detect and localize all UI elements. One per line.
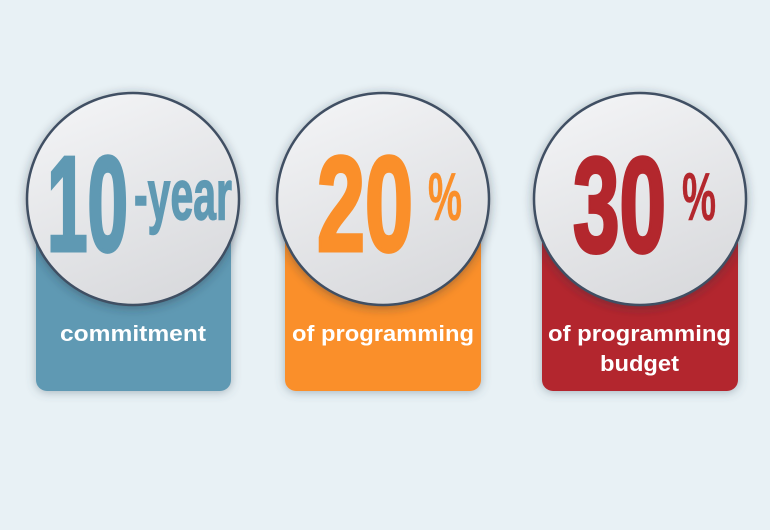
panel: 30% of programming budget (534, 93, 746, 391)
orange card (285, 210, 481, 391)
label: of programming budget: of programming (548, 321, 731, 346)
red card (542, 210, 738, 391)
blue card (36, 210, 231, 391)
percent sign: % (428, 159, 462, 235)
label: of programming budget (548, 321, 731, 376)
number 10: 10 (47, 128, 128, 280)
circle badge (534, 93, 746, 305)
circle badge (277, 93, 489, 305)
label: of programming: of programming (292, 321, 474, 346)
panel: 10-year commitment (27, 93, 239, 391)
number 30: 30 (573, 130, 666, 280)
percent sign: % (682, 159, 716, 235)
circle badge (27, 93, 239, 305)
panel: 20% of programming (277, 93, 489, 391)
label: of programming budget: budget (600, 351, 680, 376)
number 20: 20 (317, 128, 413, 280)
suffix -year: -year (134, 156, 232, 236)
label: commitment: commitment (60, 321, 207, 346)
